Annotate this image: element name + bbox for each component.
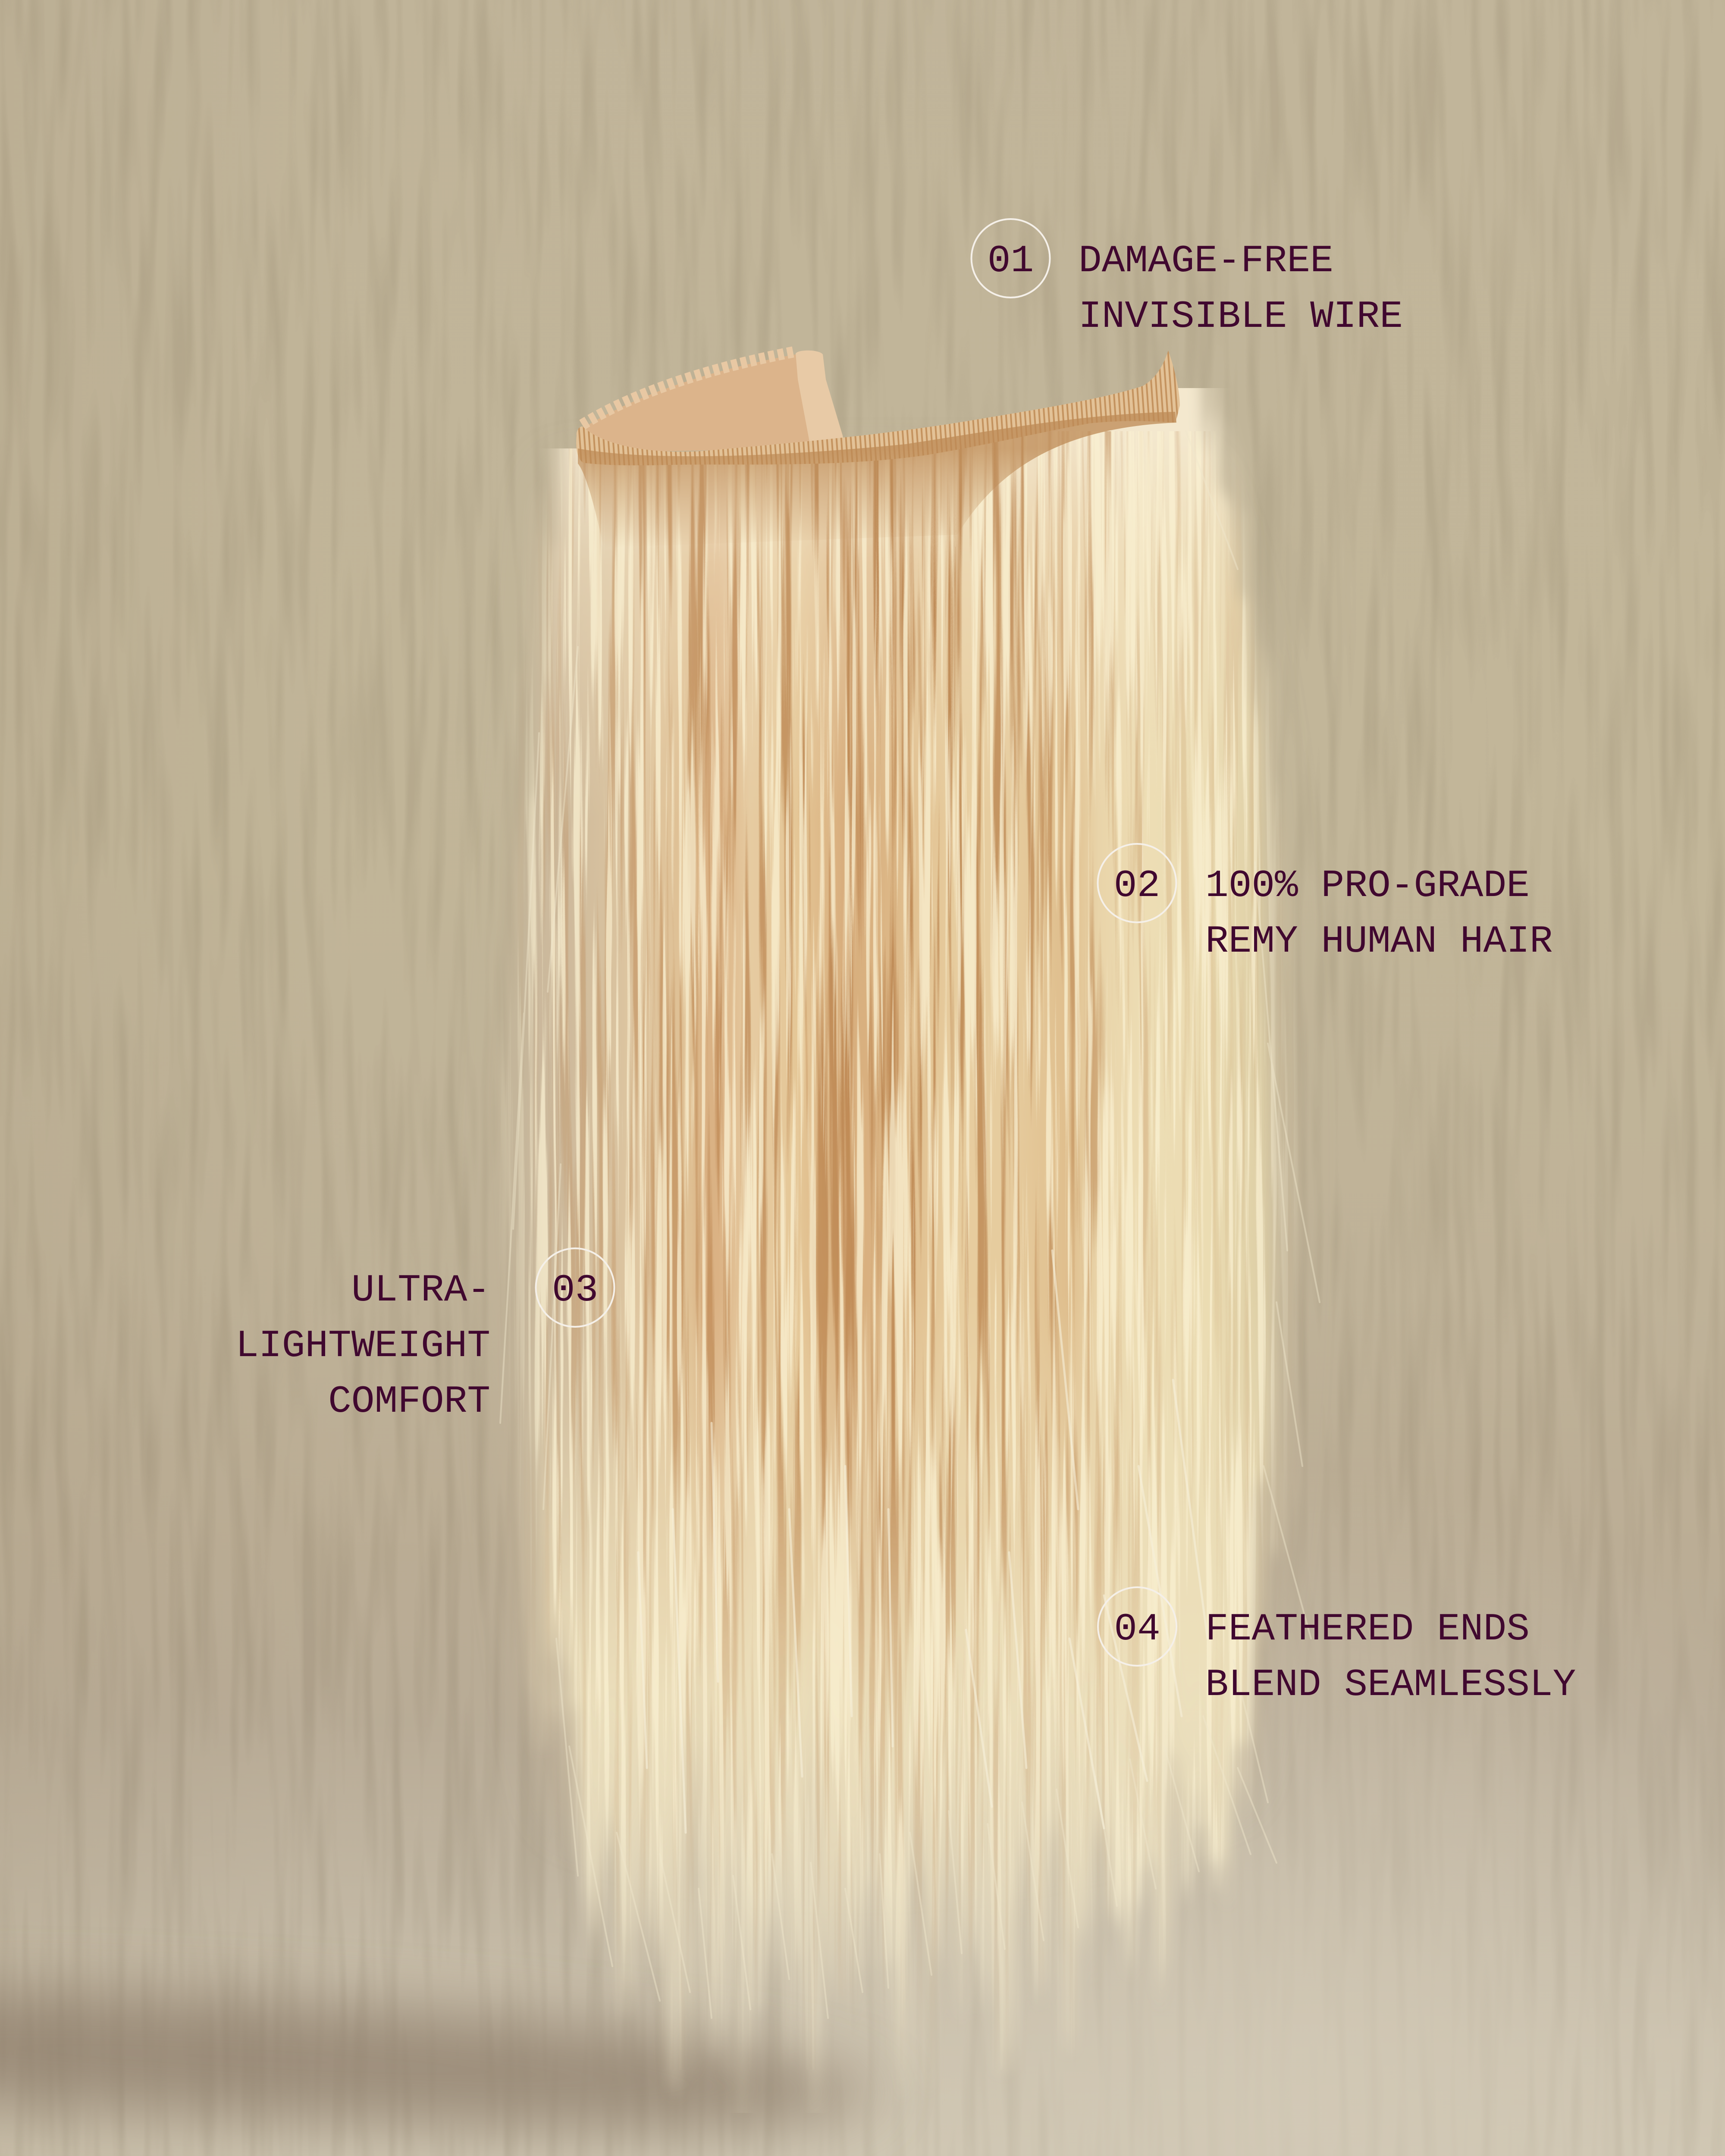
callout 03 text bbox=[235, 1268, 490, 1423]
weft stitch shadow bbox=[578, 412, 1176, 548]
callout 01 text: INVISIBLE WIRE bbox=[1079, 295, 1403, 338]
callout 01 text: DAMAGE-FREE bbox=[1079, 239, 1333, 283]
callout 04 text bbox=[1205, 1607, 1576, 1707]
callout 01 number badge bbox=[971, 219, 1050, 298]
hair base colour bands bbox=[474, 345, 1337, 2113]
callout 03 text: COMFORT bbox=[328, 1379, 490, 1423]
floor shadow bbox=[0, 1991, 884, 2131]
callout 02: pro-grade remy human hair bbox=[1098, 844, 1553, 963]
hair halo glow bbox=[511, 474, 1281, 1859]
callout 04: feathered ends blend seamlessly bbox=[1098, 1587, 1576, 1707]
net lace edge bbox=[582, 351, 796, 425]
clip tab bbox=[796, 351, 845, 448]
callout 02 text: REMY HUMAN HAIR bbox=[1205, 919, 1553, 963]
net panel bbox=[580, 354, 811, 453]
stray hair strands bbox=[500, 431, 1320, 2018]
callout 04 text: BLEND SEAMLESSLY bbox=[1205, 1663, 1576, 1707]
callout 04 text: FEATHERED ENDS bbox=[1205, 1607, 1530, 1651]
hair light strands bbox=[474, 431, 1337, 2070]
callout 04 number badge bbox=[1098, 1587, 1176, 1666]
weft stitched band bbox=[576, 351, 1180, 465]
hair dark caramel strands bbox=[474, 431, 1337, 2070]
hair pale lower lengths bbox=[474, 1294, 1337, 2113]
hair weft top band bbox=[576, 351, 1180, 548]
callout 03: ultra-lightweight comfort bbox=[235, 1248, 614, 1423]
callout 01 text bbox=[1079, 239, 1403, 338]
callout 01 number badge: 01 bbox=[988, 239, 1034, 283]
callout 01: damage-free invisible wire bbox=[971, 219, 1403, 338]
callout 02 text: 100% PRO-GRADE bbox=[1205, 864, 1530, 908]
callout 02 number badge: 02 bbox=[1114, 864, 1160, 908]
callout 02 text bbox=[1205, 864, 1553, 963]
hair root highlight bbox=[474, 345, 1337, 862]
callout 03 number badge: 03 bbox=[552, 1268, 598, 1312]
hair extension bbox=[474, 345, 1337, 2113]
callout 04 number badge: 04 bbox=[1114, 1607, 1160, 1651]
callout 02 number badge bbox=[1098, 844, 1176, 922]
callout 03 text: ULTRA- bbox=[351, 1268, 490, 1312]
callout 03 text: LIGHTWEIGHT bbox=[235, 1324, 490, 1368]
callout 03 number badge bbox=[536, 1248, 614, 1327]
